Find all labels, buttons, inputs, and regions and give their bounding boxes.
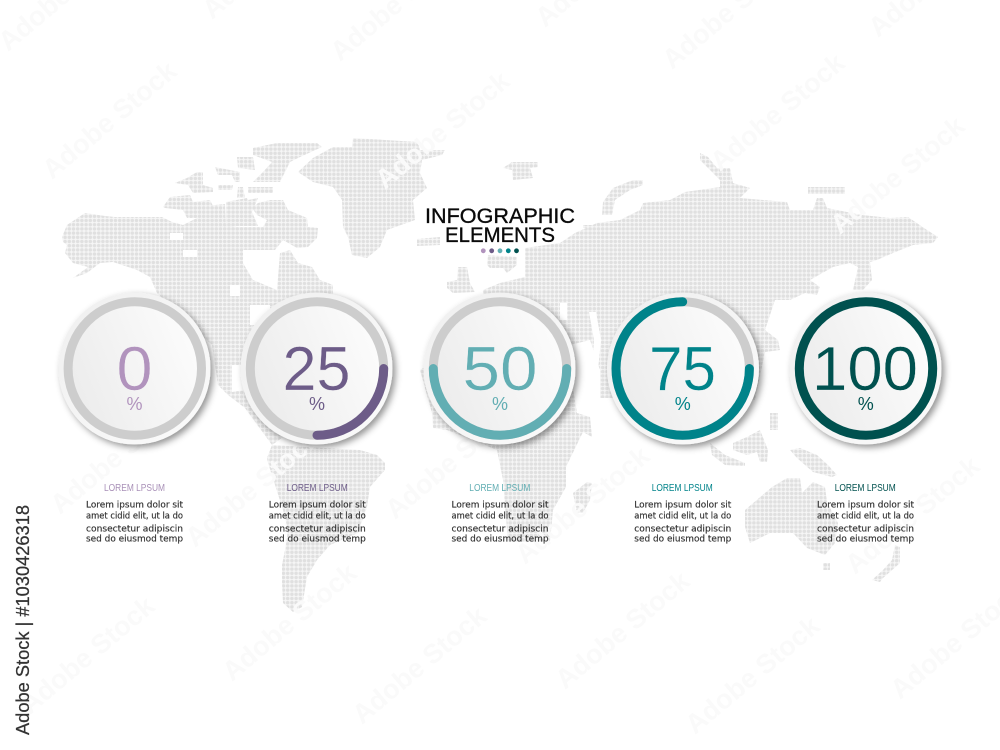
watermark: Adobe Stock bbox=[705, 47, 851, 177]
caption body: amet cidid elit, ut la do bbox=[86, 512, 183, 522]
map: North America bbox=[62, 200, 350, 445]
caption body: Lorem ipsum dolor sit bbox=[86, 500, 184, 510]
watermark: Adobe Stock bbox=[370, 65, 516, 195]
stock id text on left edge: Adobe Stock | #1030426318 bbox=[13, 505, 33, 735]
caption body: consectetur adipiscin bbox=[452, 525, 548, 535]
caption body: Lorem ipsum dolor sit bbox=[634, 500, 732, 510]
map: Arctic Russian islands bbox=[503, 162, 845, 228]
caption heading: LOREM LPSUM bbox=[835, 483, 896, 494]
title colour dots bbox=[481, 248, 519, 253]
value: 50 bbox=[462, 335, 538, 404]
value: 0 bbox=[116, 335, 152, 404]
caption body: sed do eiusmod temp bbox=[452, 535, 549, 545]
caption body: sed do eiusmod temp bbox=[86, 535, 183, 545]
watermark: Adobe Stock bbox=[347, 600, 493, 730]
caption body bbox=[86, 500, 184, 545]
map: Greenland bbox=[298, 138, 445, 258]
gauge: 50 percent bbox=[424, 292, 576, 444]
caption: 100 percent bbox=[817, 483, 915, 545]
caption body: amet cidid elit, ut la do bbox=[452, 512, 548, 522]
disc bbox=[790, 292, 942, 444]
dotted world map bbox=[62, 138, 938, 612]
map: Eurasia bbox=[483, 153, 938, 400]
disc bbox=[424, 292, 576, 444]
watermark: Adobe Stock bbox=[680, 610, 826, 740]
watermark: Adobe Stock bbox=[825, 110, 971, 240]
title line one: INFOGRAPHIC bbox=[425, 204, 575, 228]
caption: 25 percent bbox=[269, 483, 366, 545]
progress arc bbox=[616, 302, 749, 435]
caption: 0 percent bbox=[86, 483, 184, 545]
watermark: Adobe Stock bbox=[380, 395, 526, 525]
watermark: Adobe Stock bbox=[840, 450, 986, 580]
map: South-East Asia islands bbox=[710, 413, 837, 477]
caption: 50 percent bbox=[452, 483, 549, 545]
watermark: Adobe Stock bbox=[217, 557, 363, 687]
map: South America bbox=[267, 445, 385, 612]
percent sign: % bbox=[858, 394, 874, 414]
track ring bbox=[68, 302, 202, 435]
full progress ring bbox=[799, 302, 933, 435]
map water cut-outs bbox=[170, 233, 601, 392]
map: Iceland and British Isles bbox=[417, 237, 475, 293]
percent sign: % bbox=[492, 394, 508, 414]
watermark: Adobe Stock bbox=[550, 565, 696, 695]
percent sign: % bbox=[126, 394, 143, 414]
progress arc bbox=[317, 368, 384, 435]
caption body: amet cidid elit, ut la do bbox=[817, 512, 914, 522]
caption body: consectetur adipiscin bbox=[86, 525, 183, 535]
map: Africa bbox=[420, 340, 592, 542]
gauge: 100 percent bbox=[790, 292, 942, 444]
disc bbox=[240, 292, 392, 444]
percent sign: % bbox=[309, 394, 325, 414]
disc bbox=[607, 292, 759, 444]
watermark: Adobe Stock bbox=[180, 423, 326, 553]
progress arc bbox=[433, 368, 567, 435]
caption body: sed do eiusmod temp bbox=[634, 535, 732, 545]
caption body: Lorem ipsum dolor sit bbox=[269, 500, 366, 510]
caption heading: LOREM LPSUM bbox=[104, 483, 165, 494]
track ring bbox=[616, 302, 749, 435]
map: Tasmania and New Zealand bbox=[823, 545, 900, 582]
watermark: Adobe Stock bbox=[45, 390, 191, 520]
disc bbox=[58, 292, 210, 444]
map: Australia bbox=[745, 478, 838, 555]
value: 75 bbox=[649, 335, 716, 404]
value: 25 bbox=[282, 335, 350, 404]
caption: 75 percent bbox=[634, 483, 732, 545]
caption body: consectetur adipiscin bbox=[634, 525, 731, 535]
caption body: sed do eiusmod temp bbox=[817, 535, 914, 545]
caption body: sed do eiusmod temp bbox=[269, 535, 366, 545]
caption body: amet cidid elit, ut la do bbox=[634, 512, 731, 522]
watermark: Adobe Stock bbox=[510, 440, 656, 570]
gauge: 75 percent bbox=[607, 292, 759, 444]
caption body bbox=[634, 500, 732, 545]
caption body bbox=[269, 500, 366, 545]
map: Arctic islands bbox=[163, 143, 322, 226]
gauge: 25 percent bbox=[240, 292, 392, 444]
title line two: ELEMENTS bbox=[445, 223, 555, 247]
title bbox=[425, 204, 575, 253]
caption body: amet cidid elit, ut la do bbox=[269, 512, 366, 522]
caption body: consectetur adipiscin bbox=[817, 525, 914, 535]
track ring bbox=[433, 302, 567, 435]
caption heading: LOREM LPSUM bbox=[469, 483, 530, 494]
value: 100 bbox=[812, 335, 918, 404]
watermark: Adobe Stock bbox=[37, 55, 183, 185]
percent sign: % bbox=[675, 394, 691, 414]
watermark: Adobe Stock bbox=[15, 590, 161, 720]
caption body: Lorem ipsum dolor sit bbox=[452, 500, 549, 510]
caption body bbox=[817, 500, 915, 545]
gauge: 0 percent bbox=[58, 292, 210, 444]
caption heading: LOREM LPSUM bbox=[287, 483, 348, 494]
track ring bbox=[250, 302, 384, 435]
map: Madagascar bbox=[573, 482, 592, 513]
caption heading: LOREM LPSUM bbox=[652, 483, 713, 494]
caption body: consectetur adipiscin bbox=[269, 525, 366, 535]
map: Scandinavia bbox=[487, 255, 517, 273]
caption body bbox=[452, 500, 549, 545]
caption body: Lorem ipsum dolor sit bbox=[817, 500, 915, 510]
